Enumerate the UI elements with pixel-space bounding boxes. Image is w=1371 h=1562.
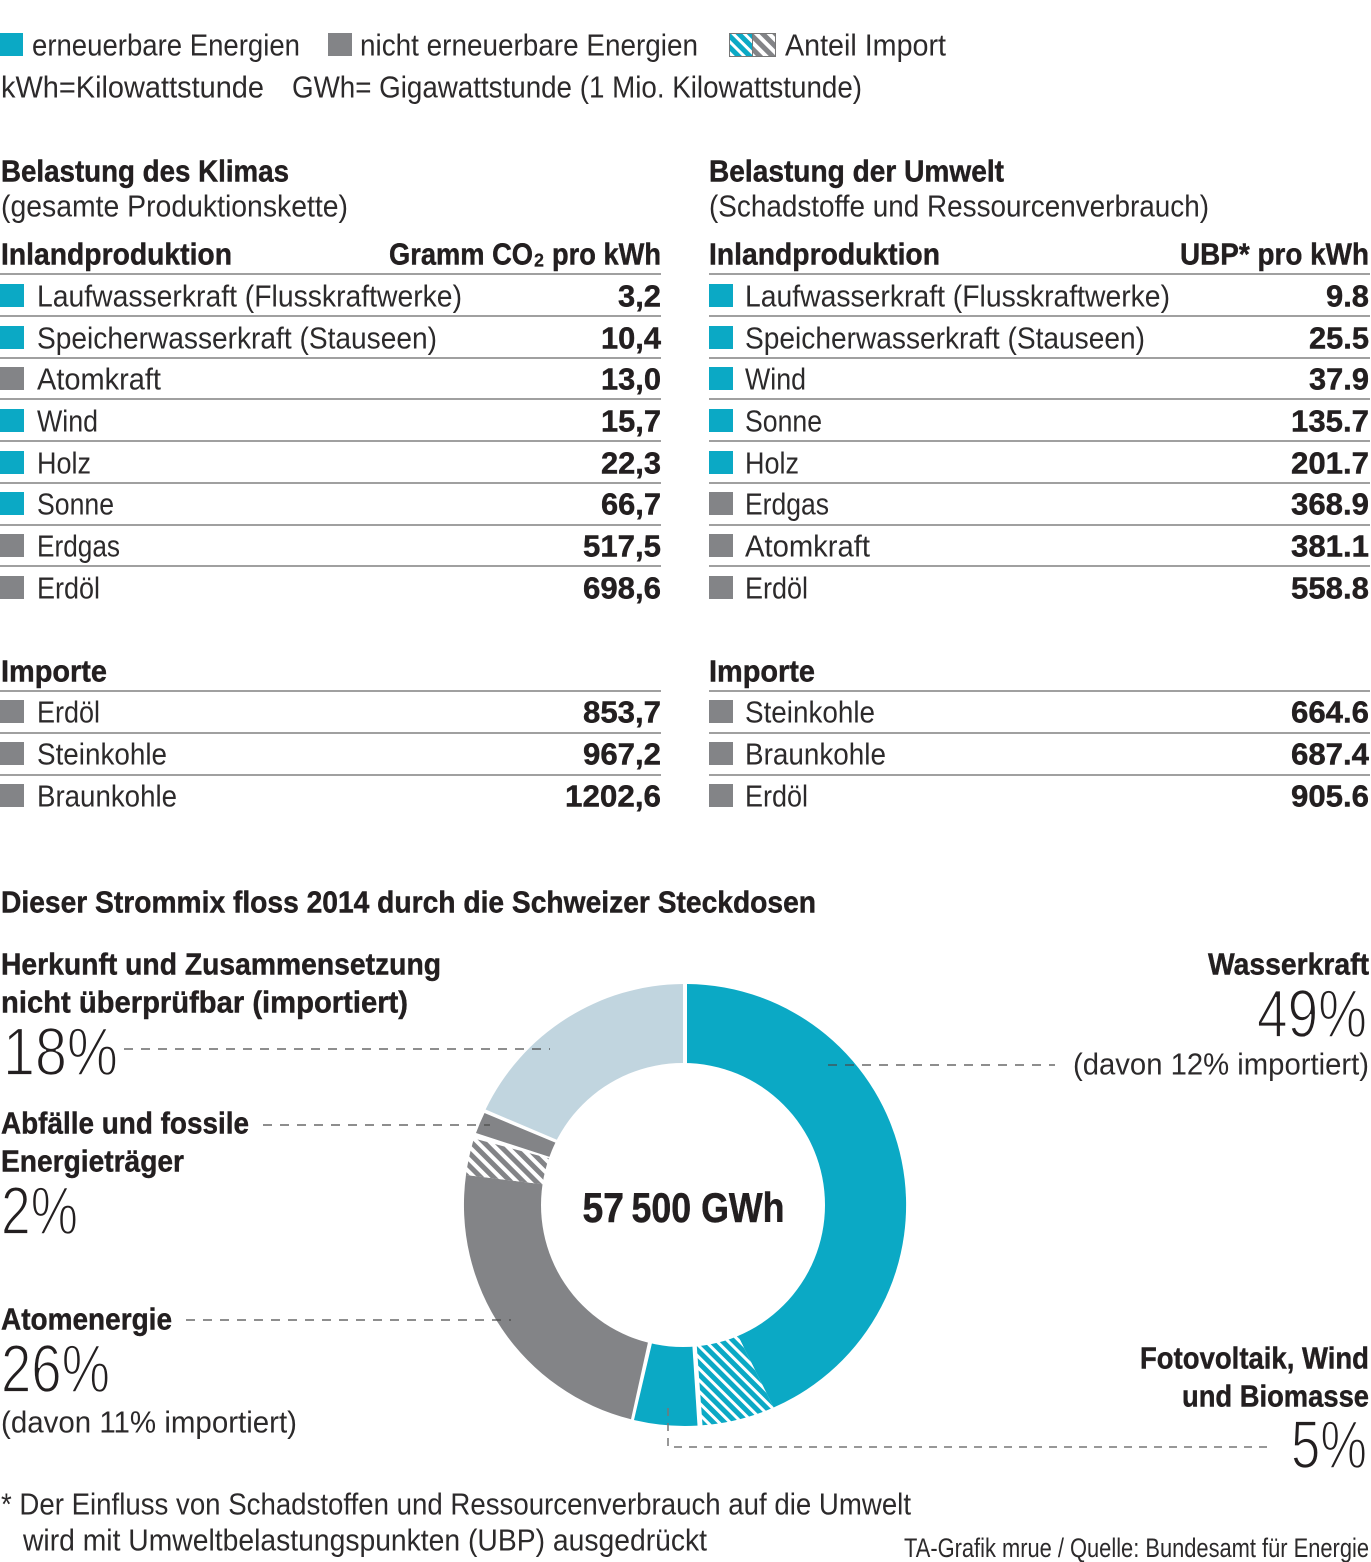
donut centre total <box>582 1184 784 1231</box>
row: import Erdöl: Erdöl <box>37 694 100 729</box>
row: Laufwasserkraft: 3,2 <box>618 278 661 313</box>
callout: not verifiable 18% <box>1 946 550 1090</box>
row: import Braunkohle <box>0 778 661 813</box>
donut centre total: 500 GWh <box>632 1184 784 1231</box>
segment: Wasserkraft imported hatch <box>696 1325 774 1425</box>
panel: climate burden <box>0 153 662 813</box>
callout: hydro 49% <box>828 946 1369 1081</box>
row: import Steinkohle: Steinkohle <box>37 736 167 771</box>
row: import Erdöl <box>0 694 661 729</box>
heading: environmental burden: Belastung der Umwelt <box>709 153 1004 188</box>
row: Erdöl: Erdöl <box>37 570 100 605</box>
row: Speicherwasserkraft: Speicherwasserkraft (Stauseen) <box>37 320 437 355</box>
row: Atomkraft: Atomkraft <box>745 528 870 563</box>
table header: domestic production: 2 <box>534 250 544 270</box>
row: Sonne: Sonne <box>745 403 822 438</box>
heading: electricity mix 2014: Dieser Strommix floss 2014 durch die Schweizer Steckdosen <box>1 884 816 919</box>
row: Atomkraft <box>0 361 661 396</box>
heading: environmental burden: (Schadstoffe und Ressourcenverbrauch) <box>709 188 1209 223</box>
row: Holz: Holz <box>37 445 91 480</box>
callout: solar wind biomass 5% <box>668 1340 1369 1483</box>
row: Sonne: 66,7 <box>601 486 661 521</box>
row: import Steinkohle: 664.6 <box>1291 694 1369 729</box>
row: Speicherwasserkraft <box>0 320 662 355</box>
row: Erdöl <box>0 570 661 605</box>
row: import Erdöl <box>709 778 1369 813</box>
row: Atomkraft: Atomkraft <box>37 361 161 396</box>
row: Erdöl: 558.8 <box>1291 570 1369 605</box>
callout: waste and fossil 2%: 2% <box>1 1173 78 1249</box>
table header: domestic production: Inlandproduktion <box>1 236 232 271</box>
table header: domestic production: pro kWh <box>552 236 661 271</box>
row: Erdgas: Erdgas <box>37 528 120 563</box>
segment: Atomenergie <box>464 1175 651 1419</box>
row: Erdgas: 368.9 <box>1291 486 1369 521</box>
row: Wind: 37.9 <box>1309 361 1369 396</box>
row: Holz: 201.7 <box>1291 445 1369 480</box>
row: Wind <box>0 403 661 438</box>
row: import Braunkohle <box>709 736 1370 771</box>
row: import Steinkohle: 967,2 <box>583 736 661 771</box>
table header: domestic production <box>1 236 661 271</box>
donut chart <box>464 984 906 1426</box>
unit definitions <box>1 69 862 104</box>
table header: imports: Importe <box>1 653 107 688</box>
row: Atomkraft: 381.1 <box>1291 528 1369 563</box>
table header: domestic production UBP <box>709 236 1369 271</box>
row: Sonne: 135.7 <box>1291 403 1369 438</box>
row: Erdöl: Erdöl <box>745 570 808 605</box>
row: import Braunkohle: 687.4 <box>1291 736 1370 771</box>
footnote: * Der Einfluss von Schadstoffen und Ressourcenverbrauch auf die Umwelt <box>1 1486 911 1521</box>
row: import Erdöl: Erdöl <box>745 778 808 813</box>
row: Laufwasserkraft: Laufwasserkraft (Flusskraftwerke) <box>37 278 462 313</box>
row: Sonne <box>709 403 1369 438</box>
row: Atomkraft <box>709 528 1369 563</box>
row: Erdöl: 698,6 <box>583 570 661 605</box>
row: Wind: Wind <box>37 403 98 438</box>
row: Erdgas <box>709 486 1369 521</box>
row: Erdgas <box>0 528 661 563</box>
donut centre total: 57 <box>582 1184 624 1231</box>
panel: environmental burden <box>709 153 1370 813</box>
row: Sonne: Sonne <box>37 486 114 521</box>
row: Erdöl <box>709 570 1369 605</box>
callout: nuclear 26%: Atomenergie <box>1 1301 172 1336</box>
row: Wind: Wind <box>745 361 806 396</box>
legend item: renewable energy: erneuerbare Energien <box>32 27 300 62</box>
heading: climate burden: Belastung des Klimas <box>1 153 289 188</box>
callout: nuclear 26%: (davon 11% importiert) <box>1 1404 297 1439</box>
row: import Steinkohle <box>709 694 1369 729</box>
row: Wind: 15,7 <box>601 403 661 438</box>
row: Laufwasserkraft: 9.8 <box>1326 278 1369 313</box>
row: Speicherwasserkraft: 10,4 <box>601 320 662 355</box>
row: Holz: 22,3 <box>601 445 661 480</box>
row: import Steinkohle <box>0 736 661 771</box>
row: Holz <box>0 445 661 480</box>
row: Wind <box>709 361 1369 396</box>
callout: not verifiable 18%: Herkunft und Zusammensetzung <box>1 946 441 981</box>
heading: environmental burden <box>709 153 1209 223</box>
row: import Braunkohle: 1202,6 <box>565 778 661 813</box>
segment: Wasserkraft solid <box>687 984 906 1408</box>
callout: nuclear 26% <box>1 1301 511 1439</box>
row: import Steinkohle: Steinkohle <box>745 694 875 729</box>
footnote <box>1 1486 911 1557</box>
callout: not verifiable 18%: nicht überprüfbar (importiert) <box>1 984 408 1019</box>
row: Atomkraft: 13,0 <box>601 361 661 396</box>
segment: Abfälle und fossile Energieträger <box>476 1113 564 1161</box>
row: import Erdöl: 853,7 <box>583 694 661 729</box>
row: import Braunkohle: Braunkohle <box>745 736 886 771</box>
row: Erdgas: 517,5 <box>583 528 661 563</box>
legend <box>0 27 946 104</box>
unit definitions: kWh=Kilowattstunde <box>1 69 264 104</box>
segment: Fotovoltaik, Wind, Biomasse <box>634 1332 698 1426</box>
segment: not verifiable imports <box>486 984 683 1143</box>
row: Speicherwasserkraft: Speicherwasserkraft (Stauseen) <box>745 320 1145 355</box>
unit definitions: GWh= Gigawattstunde (1 Mio. Kilowattstunde) <box>292 69 862 104</box>
row: Laufwasserkraft: Laufwasserkraft (Flusskraftwerke) <box>745 278 1170 313</box>
legend item: import share: Anteil Import <box>785 27 946 62</box>
row: import Erdöl: 905.6 <box>1291 778 1369 813</box>
row: Holz: Holz <box>745 445 799 480</box>
row: Sonne <box>0 486 661 521</box>
table header: domestic production UBP: Inlandproduktion <box>709 236 940 271</box>
row: Erdgas: Erdgas <box>745 486 829 521</box>
row: Speicherwasserkraft: 25.5 <box>1309 320 1369 355</box>
legend item: non-renewable energy: nicht erneuerbare Energien <box>360 27 698 62</box>
table header: imports: Importe <box>709 653 815 688</box>
footnote: wird mit Umweltbelastungspunkten (UBP) ausgedrückt <box>22 1522 707 1557</box>
heading: climate burden <box>1 153 348 223</box>
callout: waste and fossil 2%: Energieträger <box>1 1143 184 1178</box>
callout: waste and fossil 2% <box>1 1105 490 1249</box>
heading: climate burden: (gesamte Produktionskette) <box>1 188 348 223</box>
callout: waste and fossil 2%: Abfälle und fossile <box>1 1105 249 1140</box>
row: Holz <box>709 445 1369 480</box>
row: import Braunkohle: Braunkohle <box>37 778 177 813</box>
callout: not verifiable 18%: 18% <box>3 1014 118 1090</box>
segment: Atomenergie imported hatch <box>466 1138 559 1185</box>
callout: nuclear 26%: 26% <box>1 1331 110 1407</box>
table header: domestic production: Gramm CO <box>389 236 533 271</box>
row: Speicherwasserkraft <box>709 320 1369 355</box>
